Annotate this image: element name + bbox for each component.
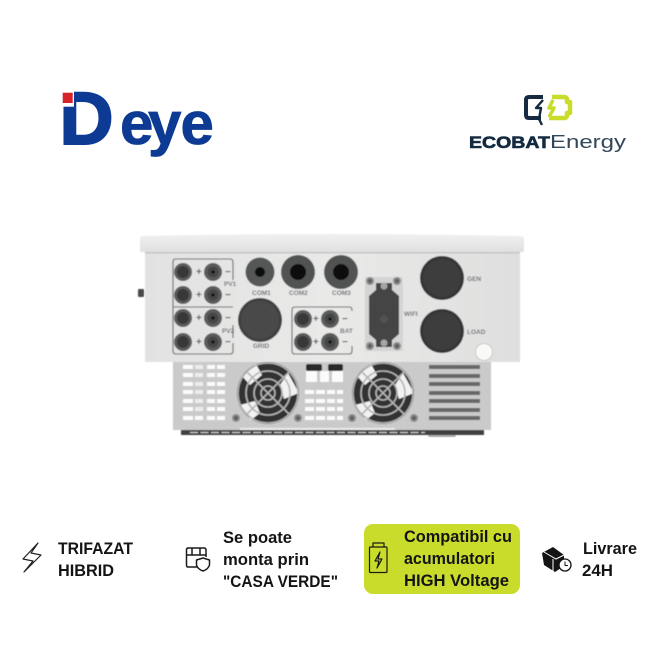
side latch (138, 289, 144, 297)
feature: Livrare 24H: Livrare (583, 540, 637, 558)
WIFI port: WIFI (404, 311, 418, 318)
logo: Ecobat Energy: ECOBAT (469, 134, 550, 152)
logo: Deye: e (180, 90, 214, 157)
feature: Compatibil acumulatori HIGH Voltage: Compatibil cu (404, 528, 512, 546)
GEN port: GEN (467, 276, 481, 283)
PV connector box: + (196, 290, 202, 301)
feature: Casa Verde: monta prin (223, 551, 309, 569)
highlight pill (364, 524, 520, 594)
BAT connector box (292, 307, 353, 354)
vent holes left (183, 365, 225, 420)
feature: Casa Verde: "CASA VERDE" (223, 573, 338, 591)
icon: lightning bolt (23, 543, 41, 572)
feature: Compatibil acumulatori HIGH Voltage (364, 524, 520, 594)
BAT connector box: − (342, 314, 348, 325)
COM ports (246, 255, 358, 297)
BAT connector box: BAT (340, 328, 353, 335)
PV connector box: + (196, 313, 202, 324)
feature: Livrare 24H: 24H (582, 562, 613, 580)
logo: Ecobat Energy: Energy (550, 132, 626, 152)
LOAD port (420, 309, 486, 353)
PV connector box: − (225, 337, 231, 348)
feature: Casa Verde: Se poate (223, 529, 292, 547)
icon: box with shield (186, 548, 210, 571)
heatsink plate (173, 360, 491, 437)
PV connector box: + (196, 337, 202, 348)
GRID port (238, 298, 282, 350)
vent holes centre (305, 371, 343, 420)
BAT connector box: + (313, 314, 319, 325)
louvers right (429, 365, 480, 420)
logo: Deye: D (60, 77, 114, 160)
fan right (352, 362, 414, 424)
icon: battery with bolt (526, 97, 570, 125)
feature: Trifazat hibrid (23, 540, 133, 580)
vent plug (476, 344, 492, 360)
feature: Compatibil acumulatori HIGH Voltage: HIGH Voltage (404, 572, 509, 590)
feature: Trifazat hibrid: HIBRID (58, 562, 114, 580)
product photo: inverter (138, 234, 524, 437)
GEN port (420, 256, 481, 300)
WIFI port (365, 277, 418, 351)
GRID port: GRID (253, 343, 270, 350)
logo: Ecobat Energy (469, 97, 626, 152)
COM ports: COM2 (289, 290, 308, 297)
enclosure body (145, 250, 520, 362)
COM ports: COM3 (332, 290, 351, 297)
feature: Livrare 24H (542, 540, 637, 580)
logo: Deye: y (148, 90, 182, 157)
PV connector box: − (225, 267, 231, 278)
PV connector box: + (196, 267, 202, 278)
PV connector box (173, 259, 237, 354)
PV connector box: − (225, 313, 231, 324)
enclosure lid (140, 234, 524, 252)
BAT connector box: + (313, 337, 319, 348)
BAT connector box: − (342, 337, 348, 348)
fan left (237, 362, 299, 424)
feature: Casa Verde (186, 529, 338, 591)
logo: Deye (56, 77, 214, 160)
COM ports: COM1 (252, 290, 271, 297)
feature: Compatibil acumulatori HIGH Voltage: acumulatori (404, 550, 495, 568)
logo: Deye: e (120, 90, 153, 157)
feature: Trifazat hibrid: TRIFAZAT (58, 540, 133, 558)
LOAD port: LOAD (467, 329, 486, 336)
PV connector box: PV2 (222, 328, 235, 335)
PV connector box: PV1 (224, 281, 237, 288)
icon: parcel with clock (542, 547, 571, 572)
PV connector box: − (225, 290, 231, 301)
icon: battery (370, 543, 387, 572)
